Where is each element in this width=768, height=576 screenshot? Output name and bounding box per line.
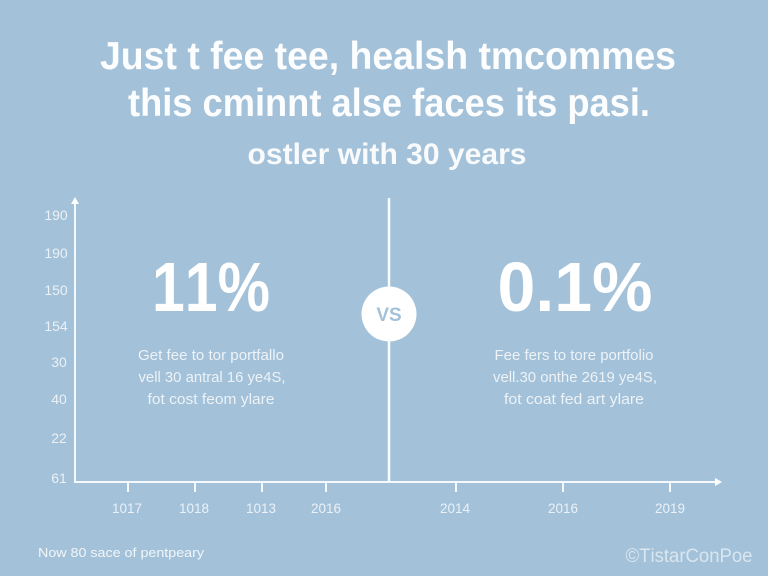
right description: fot coat fed art ylare bbox=[504, 391, 644, 408]
x axis labels: 1018 bbox=[179, 501, 209, 516]
x axis labels: 2016 bbox=[311, 501, 341, 516]
subtitle: ostler with 30 years bbox=[248, 138, 526, 171]
y axis labels: 190 bbox=[44, 245, 68, 261]
y axis labels bbox=[44, 207, 68, 486]
left description: vell 30 antral 16 ye4S, bbox=[138, 369, 286, 386]
x axis labels: 2016 bbox=[548, 501, 578, 516]
x axis labels: 1017 bbox=[112, 501, 142, 516]
right description bbox=[493, 347, 657, 408]
x axis labels: 2014 bbox=[440, 501, 471, 516]
left description: Get fee to tor portfallo bbox=[138, 347, 284, 364]
left description: fot cost feom ylare bbox=[148, 391, 274, 408]
x axis labels: 2019 bbox=[655, 501, 685, 516]
right description: Fee fers to tore portfolio bbox=[494, 347, 654, 364]
x axis labels bbox=[112, 501, 685, 516]
y axis labels: 190 bbox=[44, 207, 68, 223]
chart axes bbox=[71, 197, 722, 492]
x axis labels: 1013 bbox=[246, 501, 276, 516]
y axis labels: 150 bbox=[44, 282, 68, 298]
vs badge: VS bbox=[376, 305, 402, 326]
left panel: 11%: 11% bbox=[152, 248, 270, 326]
vs badge bbox=[362, 286, 416, 342]
footnote: Now 80 sace of pentpeary bbox=[38, 545, 205, 560]
right panel: 0.1% bbox=[493, 248, 657, 408]
title: this cminnt alse faces its pasi. bbox=[128, 82, 650, 125]
y axis labels: 22 bbox=[51, 430, 67, 446]
y axis labels: 40 bbox=[51, 391, 67, 407]
left panel: 11% bbox=[138, 248, 286, 408]
right description: vell.30 onthe 2619 ye4S, bbox=[493, 369, 657, 386]
right panel: 0.1%: 0.1% bbox=[498, 248, 652, 326]
vertical divider bbox=[388, 198, 390, 482]
y axis labels: 30 bbox=[51, 354, 67, 370]
title bbox=[100, 35, 676, 125]
y axis labels: 154 bbox=[44, 318, 68, 334]
y axis labels: 61 bbox=[51, 470, 67, 486]
title: Just t fee tee, healsh tmcommes bbox=[100, 35, 676, 78]
watermark: ©TistarConPoe bbox=[626, 546, 752, 567]
left description bbox=[138, 347, 286, 408]
